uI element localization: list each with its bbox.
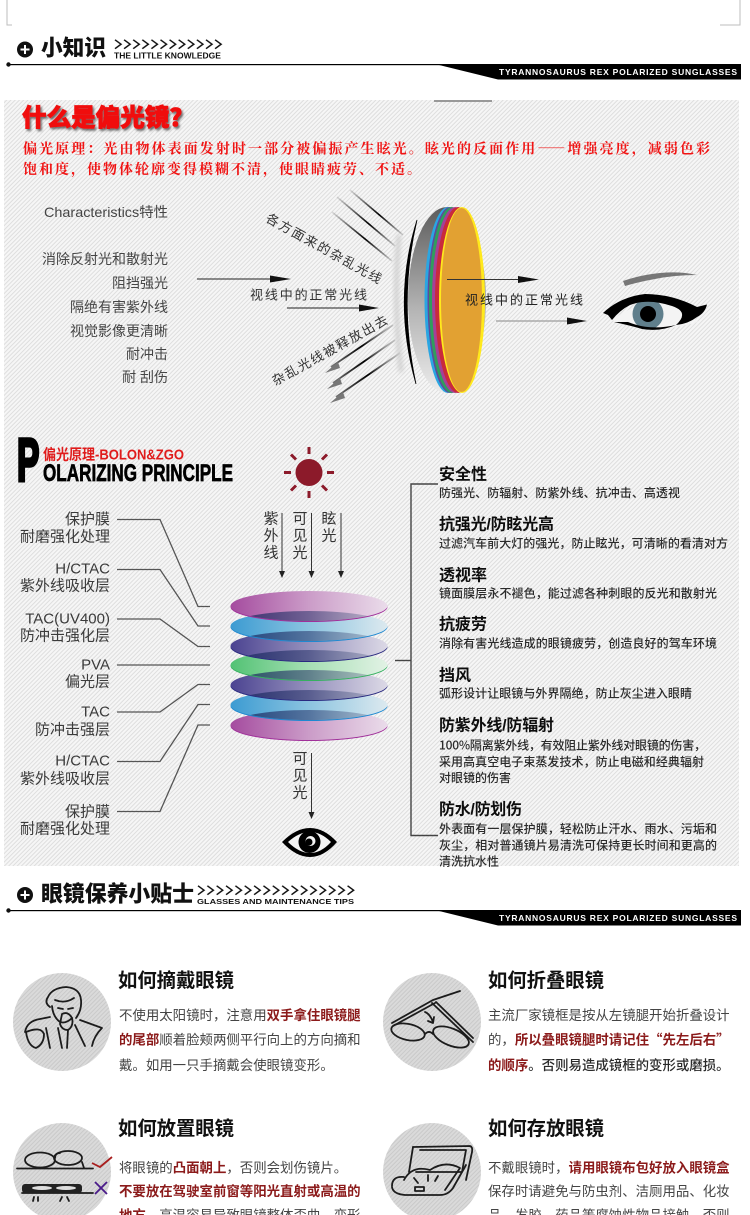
feature: safety: 防强光、防辐射、防紫外线、抗冲击、高透视 [439, 484, 680, 501]
layer labels: 耐磨强化处理 [20, 528, 110, 546]
label: visible light out: 见 [292, 768, 308, 784]
red intro text: 偏光原理：光由物体表面发射时一部分被偏振产生眩光。眩光的反面作用——增强亮度，减弱色彩 [23, 138, 710, 158]
subtitle: THE LITTLE KNOWLEDGE [114, 50, 221, 60]
body: 的顺序。否则易造成镜框的变形或磨损。 [488, 1054, 730, 1074]
characteristics list: 阻挡强光 [112, 275, 168, 291]
label: visible light: 可 [292, 510, 308, 528]
feature: waterproof: 外表面有一层保护膜，轻松防止汗水、雨水、污垢和 [439, 820, 717, 837]
feature: windproof [439, 666, 692, 702]
bracket connector [395, 484, 438, 836]
feature: UV protection [439, 716, 706, 786]
rule with dot [6, 62, 740, 67]
label: visible light: 光 [292, 544, 308, 562]
icon: glasses case [383, 1123, 481, 1215]
visible light output [282, 750, 337, 857]
characteristics list [42, 204, 168, 385]
characteristics list: 耐 刮伤 [122, 369, 168, 385]
page corner frame [7, 0, 740, 25]
feature: anti glare: 过滤汽车前大灯的强光，防止眩光，可清晰的看清对方 [439, 534, 728, 552]
subtitle: GLASSES AND MAINTENANCE TIPS [197, 897, 354, 906]
label: UV: 外 [263, 528, 279, 544]
layer labels: PVA [81, 656, 110, 674]
body: 戴。如用一只手摘戴会使眼镜变形。 [119, 1054, 334, 1074]
feature: anti fatigue: 抗疲劳 [439, 614, 487, 634]
heading: 如何放置眼镜 [118, 1117, 234, 1140]
red subtitle: 偏光原理-BOLON&ZGO [43, 446, 184, 464]
label: stray light from all sides: 各方面来的杂乱光线 [263, 210, 384, 287]
red intro text [23, 138, 710, 179]
body: 的尾部顺着脸颊两侧平行向上的方向摘和 [119, 1028, 361, 1048]
heading: 小知识: 小知识 [41, 36, 106, 60]
panel: what is polarized lens [4, 100, 739, 866]
arrow: incoming normal light [197, 276, 291, 282]
OLARIZING PRINCIPLE: OLARIZING PRINCIPLE [43, 460, 233, 487]
feature: safety: 安全性 [439, 464, 487, 484]
body [119, 1004, 361, 1074]
lens layer stack [230, 591, 388, 741]
feature: transmittance [439, 566, 717, 602]
layer labels: 防冲击强层 [35, 722, 110, 738]
layer labels: 保护膜 [65, 511, 110, 528]
feature: anti glare: 抗强光/防眩光高 [439, 514, 554, 534]
chevron strip [197, 885, 356, 896]
feature: waterproof: 防水/防划伤 [439, 800, 522, 818]
heading: 如何摘戴眼镜 [118, 969, 234, 992]
section header: little knowledge [6, 36, 741, 80]
label: visible light: 见 [292, 528, 308, 544]
feature: UV protection: 100%隔离紫外线，有效阻止紫外线对眼镜的伤害， [439, 736, 706, 754]
big initial P: P [17, 428, 39, 494]
black brand bar [435, 64, 741, 80]
feature list [439, 464, 728, 870]
body [488, 1160, 730, 1215]
rule with dot [6, 908, 740, 913]
body: 不使用太阳镜时，注意用双手拿住眼镜腿 [119, 1004, 361, 1024]
feature: UV protection: 采用高真空电子束蒸发技术，防止电磁和经典辐射 [439, 753, 704, 770]
label: glare: 眩 [321, 510, 337, 528]
heading: 如何存放眼镜 [488, 1117, 604, 1140]
layer labels: 紫外线吸收层 [20, 578, 110, 594]
label: UV: 紫 [263, 510, 279, 528]
arrow: to the eye [496, 318, 587, 324]
feature: waterproof [439, 800, 717, 870]
layer labels [20, 511, 110, 838]
lens layers [408, 207, 486, 393]
layer leader lines [117, 520, 210, 812]
characteristics list: 耐冲击 [126, 346, 168, 362]
section header: maintenance tips [6, 882, 741, 926]
label: glare: 光 [321, 528, 337, 544]
incoming light labels and arrows [263, 510, 344, 578]
brand text: TYRANNOSAURUS REX POLARIZED SUNGLASSES [499, 67, 737, 77]
plus badge icon [17, 42, 33, 58]
label: visible light out [292, 750, 308, 802]
label: visible light [292, 510, 308, 562]
feature: waterproof: 清洗抗水性 [439, 852, 499, 870]
heading: 如何折叠眼镜 [488, 969, 604, 992]
body: 保存时请避免与防虫剂、洁厕用品、化妆 [488, 1180, 730, 1200]
label: normal light after lens: 视线中的正常光线 [465, 292, 583, 308]
label: UV [263, 510, 279, 562]
label: UV: 线 [263, 544, 279, 562]
body: 主流厂家镜框是按从左镜腿开始折叠设计 [488, 1004, 730, 1024]
brand text: TYRANNOSAURUS REX POLARIZED SUNGLASSES [499, 913, 737, 923]
layer labels: 紫外线吸收层 [20, 770, 110, 788]
layer labels: 偏光层 [65, 674, 110, 690]
black brand bar [435, 910, 741, 926]
stray rays incoming [332, 190, 403, 261]
body: 不要放在驾驶室前窗等阳光直射或高温的 [119, 1180, 361, 1200]
arrow: down to eye [308, 753, 314, 819]
body: 将眼镜的凸面朝上，否则会划伤镜片。 [119, 1157, 347, 1177]
layer labels: 防冲击强化层 [20, 628, 110, 644]
heading: 眼镜保养小贴士: 眼镜保养小贴士 [41, 882, 194, 906]
tip: how to fold glasses [383, 969, 730, 1074]
feature: windproof: 挡风 [439, 666, 471, 684]
layer labels: H/CTAC [55, 560, 110, 578]
label: normal light: 视线中的正常光线 [250, 288, 367, 302]
icon: eye [603, 272, 707, 330]
feature: UV protection: 对眼镜的伤害 [439, 769, 511, 786]
characteristics list: 视觉影像更清晰 [70, 323, 168, 339]
tip: how to place glasses [13, 1117, 361, 1215]
label: visible light out: 可 [292, 750, 308, 768]
down arrows [279, 513, 344, 578]
feature: anti fatigue: 消除有害光线造成的眼镜疲劳，创造良好的驾车环境 [439, 634, 717, 652]
tip: how to store glasses [383, 1117, 743, 1215]
chevron strip [114, 39, 223, 50]
feature: anti fatigue [439, 614, 717, 652]
characteristics list: 隔绝有害紫外线 [70, 299, 168, 315]
layer labels: TAC(UV400) [25, 610, 110, 628]
body [488, 1004, 730, 1074]
layer labels: 保护膜 [65, 804, 110, 820]
feature: UV protection: 防紫外线/防辐射 [439, 716, 554, 734]
heading: polarizing principle [17, 428, 233, 494]
body: 不戴眼镜时，请用眼镜布包好放入眼镜盒， [488, 1157, 743, 1177]
icon: outline eye [282, 828, 337, 857]
icon: man holding glasses [13, 973, 111, 1071]
body [119, 1157, 361, 1215]
tip: how to put on glasses [13, 969, 361, 1074]
body: 的，所以叠眼镜腿时请记住“先左后右” [488, 1028, 730, 1048]
feature: anti glare [439, 514, 728, 552]
feature: waterproof: 灰尘，相对普通镜片易清洗可保持更长时间和更高的 [439, 836, 717, 854]
icon: folding glasses [383, 973, 481, 1071]
plus badge icon [17, 887, 33, 903]
cropped fragment at panel top [434, 100, 492, 102]
characteristics list: Characteristics特性 [44, 204, 168, 220]
feature: transmittance: 透视率 [439, 566, 487, 584]
layer labels: H/CTAC [55, 752, 110, 770]
red intro text: 饱和度，使物体轮廓变得模糊不清，使眼睛疲劳、不适。 [23, 159, 421, 179]
layer labels: 耐磨强化处理 [20, 820, 110, 838]
characteristics list: 消除反射光和散射光 [42, 251, 168, 267]
feature: transmittance: 镜面膜层永不褪色，能过滤各种刺眼的反光和散射光 [439, 584, 717, 602]
layer labels: TAC [81, 704, 110, 720]
label: stray light released: 杂乱光线被释放出去 [269, 312, 390, 389]
stray rays released [325, 325, 400, 403]
curved outer lens [396, 220, 417, 384]
feature: windproof: 弧形设计让眼镜与外界隔绝，防止灰尘进入眼睛 [439, 684, 692, 702]
label: visible light out: 光 [292, 784, 308, 802]
arrow: normal light 2 [287, 304, 379, 312]
diagram: light through polarized lens [197, 190, 707, 403]
icon: sun [284, 447, 334, 498]
title: 什么是偏光镜: 什么是偏光镜？ [22, 103, 194, 132]
label: glare [321, 510, 337, 544]
feature: safety [439, 464, 680, 501]
arrow: after lens [447, 276, 539, 283]
icon: glasses on table [13, 1123, 112, 1215]
